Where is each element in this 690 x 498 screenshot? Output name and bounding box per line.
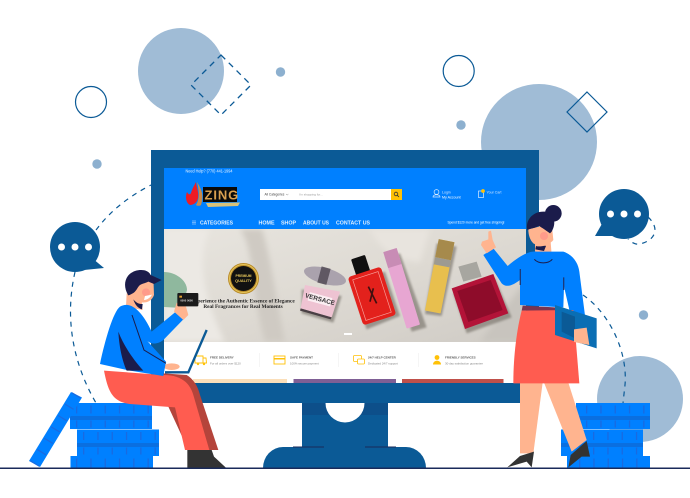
bottle: Versace: VERSACE xyxy=(304,292,336,307)
background circle: top left xyxy=(138,28,224,114)
feature: free delivery: FREE DELIVERY xyxy=(210,356,234,360)
cart link: Your Cart xyxy=(486,190,502,194)
feature: help center: 24/7 HELP CENTER xyxy=(368,356,397,360)
site header xyxy=(164,168,526,229)
feature: friendly services: 30-day satisfaction guarantee xyxy=(445,362,483,366)
cart link xyxy=(478,189,502,198)
quality seal: QUALITY xyxy=(235,279,252,283)
shirt shadow xyxy=(118,332,143,371)
hair xyxy=(125,270,162,295)
face xyxy=(133,277,154,303)
bottle: crimson xyxy=(452,262,508,329)
feature: safe payment: SAFE PAYMENT xyxy=(290,356,313,360)
bottle: gold xyxy=(425,239,454,314)
holding hand xyxy=(174,303,188,320)
help phone: Need Help? (770) 441-1994 xyxy=(186,168,233,174)
raised hand xyxy=(481,231,496,253)
account link xyxy=(433,190,461,200)
hand on laptop xyxy=(164,363,180,370)
feature: safe payment: 100% secure payment xyxy=(290,362,319,366)
background circle: right xyxy=(481,84,597,200)
feature: friendly services: FRIENDLY SERVICES xyxy=(445,356,476,360)
navigation: CATEGORIES xyxy=(200,220,233,226)
feature: free delivery xyxy=(195,356,241,366)
dot: bottom right xyxy=(639,310,648,320)
front leg xyxy=(104,371,209,450)
account link: My Account xyxy=(442,196,461,200)
navigation: ABOUT US xyxy=(303,220,329,226)
coin stack: right xyxy=(561,403,650,468)
background circle: bottom right xyxy=(597,356,683,442)
folder xyxy=(555,305,597,348)
monitor frame xyxy=(151,150,539,403)
ground line xyxy=(0,468,690,469)
hero tagline: Experience the Authentic Essence of Elegance xyxy=(191,298,295,304)
shoes xyxy=(507,452,534,467)
navigation: CONTACT US xyxy=(336,220,370,226)
bottle: Polo red xyxy=(348,255,396,325)
shoe xyxy=(187,450,227,468)
dot: left xyxy=(92,159,102,169)
coin stack: left xyxy=(70,403,159,468)
quality seal: PREMIUM xyxy=(235,274,252,278)
features row xyxy=(164,342,526,383)
face xyxy=(528,223,553,245)
website screen xyxy=(164,168,526,383)
search bar: I'm shopping for... xyxy=(299,193,323,197)
navigation: HOME xyxy=(258,220,275,226)
feature: friendly services xyxy=(433,355,483,366)
neck xyxy=(535,233,552,255)
shirt xyxy=(100,305,183,376)
outline circle: left xyxy=(76,86,106,118)
bottle: Versace xyxy=(300,263,348,319)
dashed diamond xyxy=(191,55,251,115)
feature: help center xyxy=(354,356,398,366)
speech bubble: left xyxy=(50,222,104,272)
speech bubble: right xyxy=(595,189,649,239)
hero banner xyxy=(164,229,526,342)
laptop xyxy=(165,330,207,372)
hero tagline: Real Fragrances for Real Moments xyxy=(203,304,283,310)
hair xyxy=(527,212,554,233)
dot: top xyxy=(276,67,285,77)
slider indicator xyxy=(344,333,352,335)
promo cards xyxy=(193,379,504,383)
feature: safe payment xyxy=(274,356,319,366)
folder hand xyxy=(574,328,589,345)
legs xyxy=(520,383,543,453)
navigation xyxy=(192,220,504,226)
belt xyxy=(522,306,555,311)
quality seal xyxy=(228,263,259,294)
man with laptop and card xyxy=(100,270,227,468)
shirt details xyxy=(534,259,552,263)
hero tagline xyxy=(198,299,295,309)
credit card: 0000 0000 xyxy=(180,298,193,302)
credit card xyxy=(177,293,198,306)
perfume bottles xyxy=(300,239,512,333)
back leg xyxy=(163,373,218,450)
account link: Login xyxy=(442,190,451,194)
navigation: Spend $120 more and get free shipping! xyxy=(448,220,504,224)
woman with folder xyxy=(481,205,597,467)
navigation: SHOP xyxy=(281,220,296,226)
outline circle: right xyxy=(443,56,474,86)
dot: right xyxy=(456,120,466,130)
fallen coin roll xyxy=(29,392,82,467)
monitor stand xyxy=(263,384,426,468)
skirt xyxy=(513,310,579,383)
search bar xyxy=(260,189,402,200)
green plant xyxy=(164,272,187,308)
dashed connector lines xyxy=(71,185,655,403)
search bar: All Categories xyxy=(264,193,285,197)
feature: free delivery: For all orders over $120 xyxy=(210,362,241,366)
bottle: pink spray xyxy=(383,248,420,329)
outline diamond xyxy=(567,92,607,132)
logo: ZING xyxy=(204,188,239,202)
shirt xyxy=(483,248,587,330)
logo xyxy=(186,182,240,207)
neck xyxy=(126,292,143,310)
feature: help center: Dedicated 24/7 support xyxy=(368,362,398,366)
